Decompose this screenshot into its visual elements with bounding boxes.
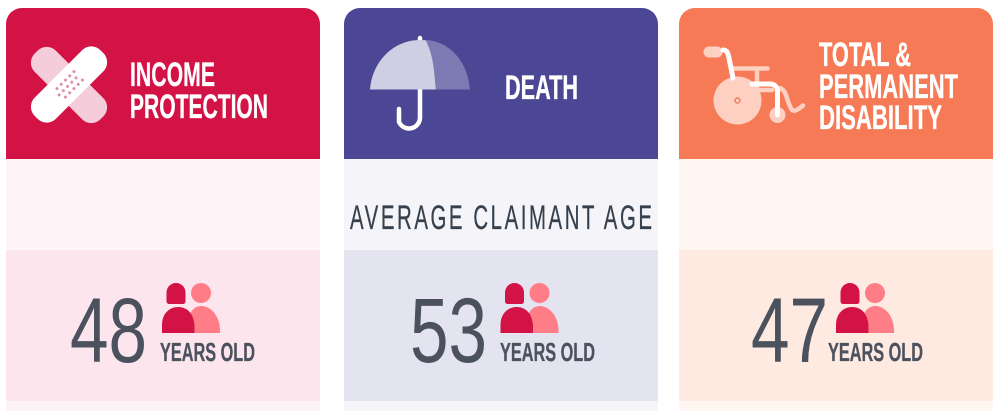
panel: death xyxy=(344,8,658,411)
heading: total and permanent disability xyxy=(819,36,958,137)
icon: people xyxy=(836,283,894,333)
stat: 53 years old: YEARS OLD xyxy=(500,337,595,367)
heading: income protection xyxy=(130,56,268,126)
heading: income protection: INCOME xyxy=(130,56,215,94)
icon: people xyxy=(500,283,558,333)
heading: income protection: PROTECTION xyxy=(130,88,268,126)
stat: 47 years old: 47 xyxy=(751,280,828,382)
icon: wheelchair xyxy=(704,46,803,124)
heading: total and permanent disability: TOTAL & xyxy=(819,36,911,74)
header: income protection xyxy=(6,8,320,159)
header: total and permanent disability xyxy=(679,8,993,159)
stat: 47 years old: YEARS OLD xyxy=(828,337,923,367)
stat: 53 years old: 53 xyxy=(410,280,487,382)
heading: death: DEATH xyxy=(505,69,578,107)
stat: 48 years old xyxy=(70,280,255,382)
icon: people xyxy=(162,283,220,333)
stat: 47 years old xyxy=(751,280,923,382)
panel: income protection xyxy=(6,8,320,411)
icon: bandage xyxy=(26,41,112,128)
panel: total and permanent disability xyxy=(679,8,993,411)
icon: umbrella xyxy=(370,38,470,128)
header: death xyxy=(344,8,658,159)
stat: 48 years old: 48 xyxy=(70,280,147,382)
stat: 48 years old: YEARS OLD xyxy=(160,337,255,367)
heading: average claimant age: AVERAGE CLAIMANT AGE xyxy=(350,199,655,236)
stat: 53 years old xyxy=(410,280,595,382)
